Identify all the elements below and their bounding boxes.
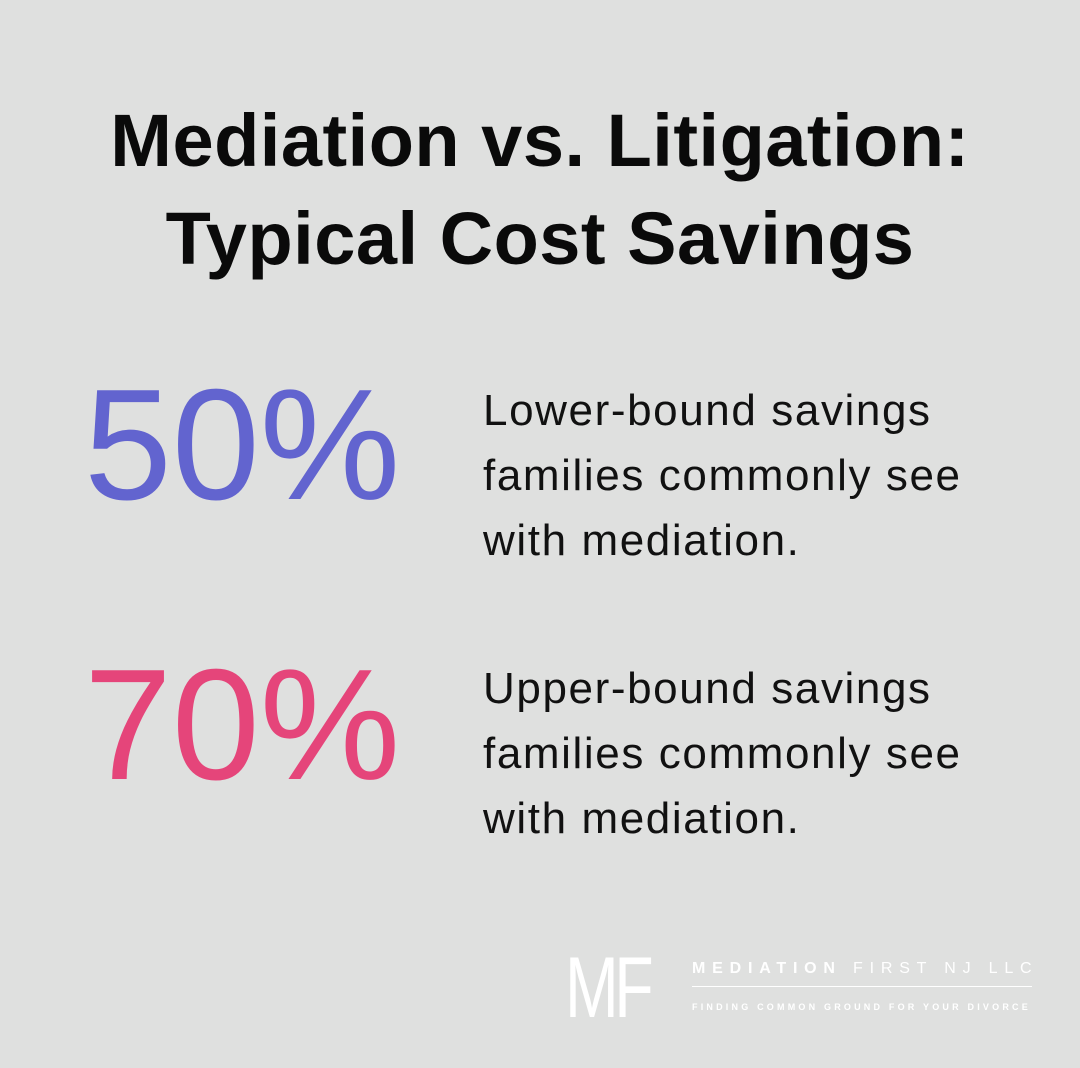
text: upper-bound: families commonly see [483,729,962,778]
logo [565,940,1038,1036]
title: Mediation vs. Litigation: [110,99,970,182]
tagline: FINDING COMMON GROUND FOR YOUR DIVORCE [692,1002,1031,1012]
text: lower-bound: Lower-bound savings [483,386,932,435]
number 70%: 70% [84,637,400,813]
text: lower-bound: with mediation. [483,516,800,565]
text: upper-bound: with mediation. [483,794,800,843]
logo name: MEDIATION FIRST NJ LLC [692,960,1038,977]
text: lower-bound [483,386,962,565]
text: upper-bound: Upper-bound savings [483,664,932,713]
text: lower-bound: families commonly see [483,451,962,500]
title [110,99,970,280]
number 50%: 50% [84,357,400,533]
logo mark MF: MF [565,940,649,1036]
title: Typical Cost Savings [166,197,914,280]
text: upper-bound [483,664,962,843]
